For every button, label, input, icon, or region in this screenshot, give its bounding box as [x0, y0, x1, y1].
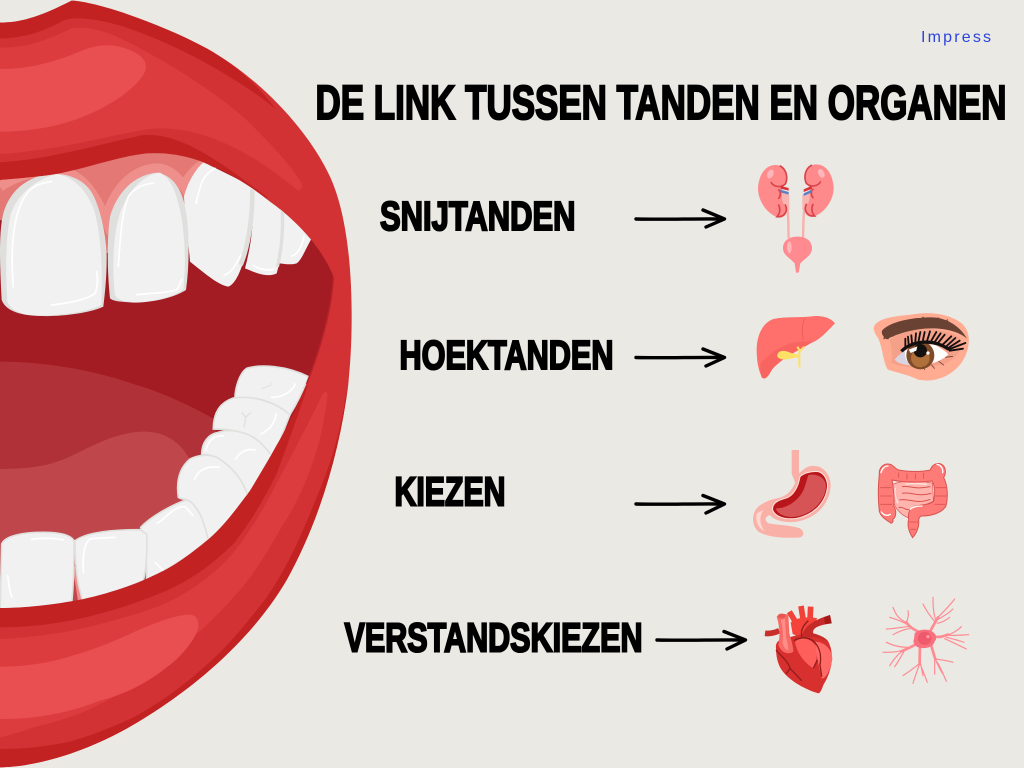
lower lip main	[0, 392, 328, 737]
icon: intestines	[878, 464, 947, 538]
lower lip highlight	[0, 615, 198, 719]
icon: stomach	[753, 450, 831, 538]
upper tooth 4	[245, 187, 284, 275]
lower tooth 2	[75, 530, 147, 604]
arrow: verstandskiezen	[657, 632, 746, 649]
label: hoektanden: HOEKTANDEN	[400, 332, 614, 378]
icon: eye	[874, 313, 969, 381]
lower tooth 4	[178, 455, 248, 541]
lower lip inner rim	[0, 384, 308, 627]
icon: kidneys and bladder	[758, 164, 834, 273]
upper tooth 5	[279, 207, 312, 264]
lower molar 5	[202, 431, 273, 497]
label: snijtanden: SNIJTANDEN	[380, 193, 576, 239]
illustration: open mouth with lips and teeth	[0, 0, 367, 767]
arrow: kiezen	[636, 496, 724, 513]
upper lip main	[0, 28, 302, 190]
lower molar 6	[213, 397, 290, 458]
upper tooth 3	[184, 162, 255, 287]
upper lip highlight	[0, 45, 146, 132]
arrow: hoektanden	[636, 349, 724, 366]
lower lip outer rim	[0, 384, 348, 767]
mouth interior	[0, 153, 334, 608]
icon: liver	[757, 316, 835, 379]
icon: heart	[765, 606, 832, 693]
arrow: snijtanden	[636, 210, 724, 227]
upper lip outer rim	[0, 1, 277, 110]
tongue back	[0, 362, 216, 469]
lower tooth 3	[141, 500, 208, 581]
lips base	[0, 1, 352, 767]
upper tooth 2	[108, 173, 189, 303]
upper tooth 1	[0, 174, 107, 316]
lower molar 7	[235, 366, 308, 415]
tongue front	[0, 432, 189, 601]
label: verstandskiezen: VERSTANDSKIEZEN	[344, 614, 642, 660]
lower tooth 1	[0, 532, 74, 617]
gums	[0, 147, 213, 253]
icon: neuron	[883, 597, 969, 683]
brand label: Impress	[921, 29, 991, 46]
label: kiezen: KIEZEN	[394, 468, 506, 514]
upper lip inner rim	[0, 135, 267, 233]
